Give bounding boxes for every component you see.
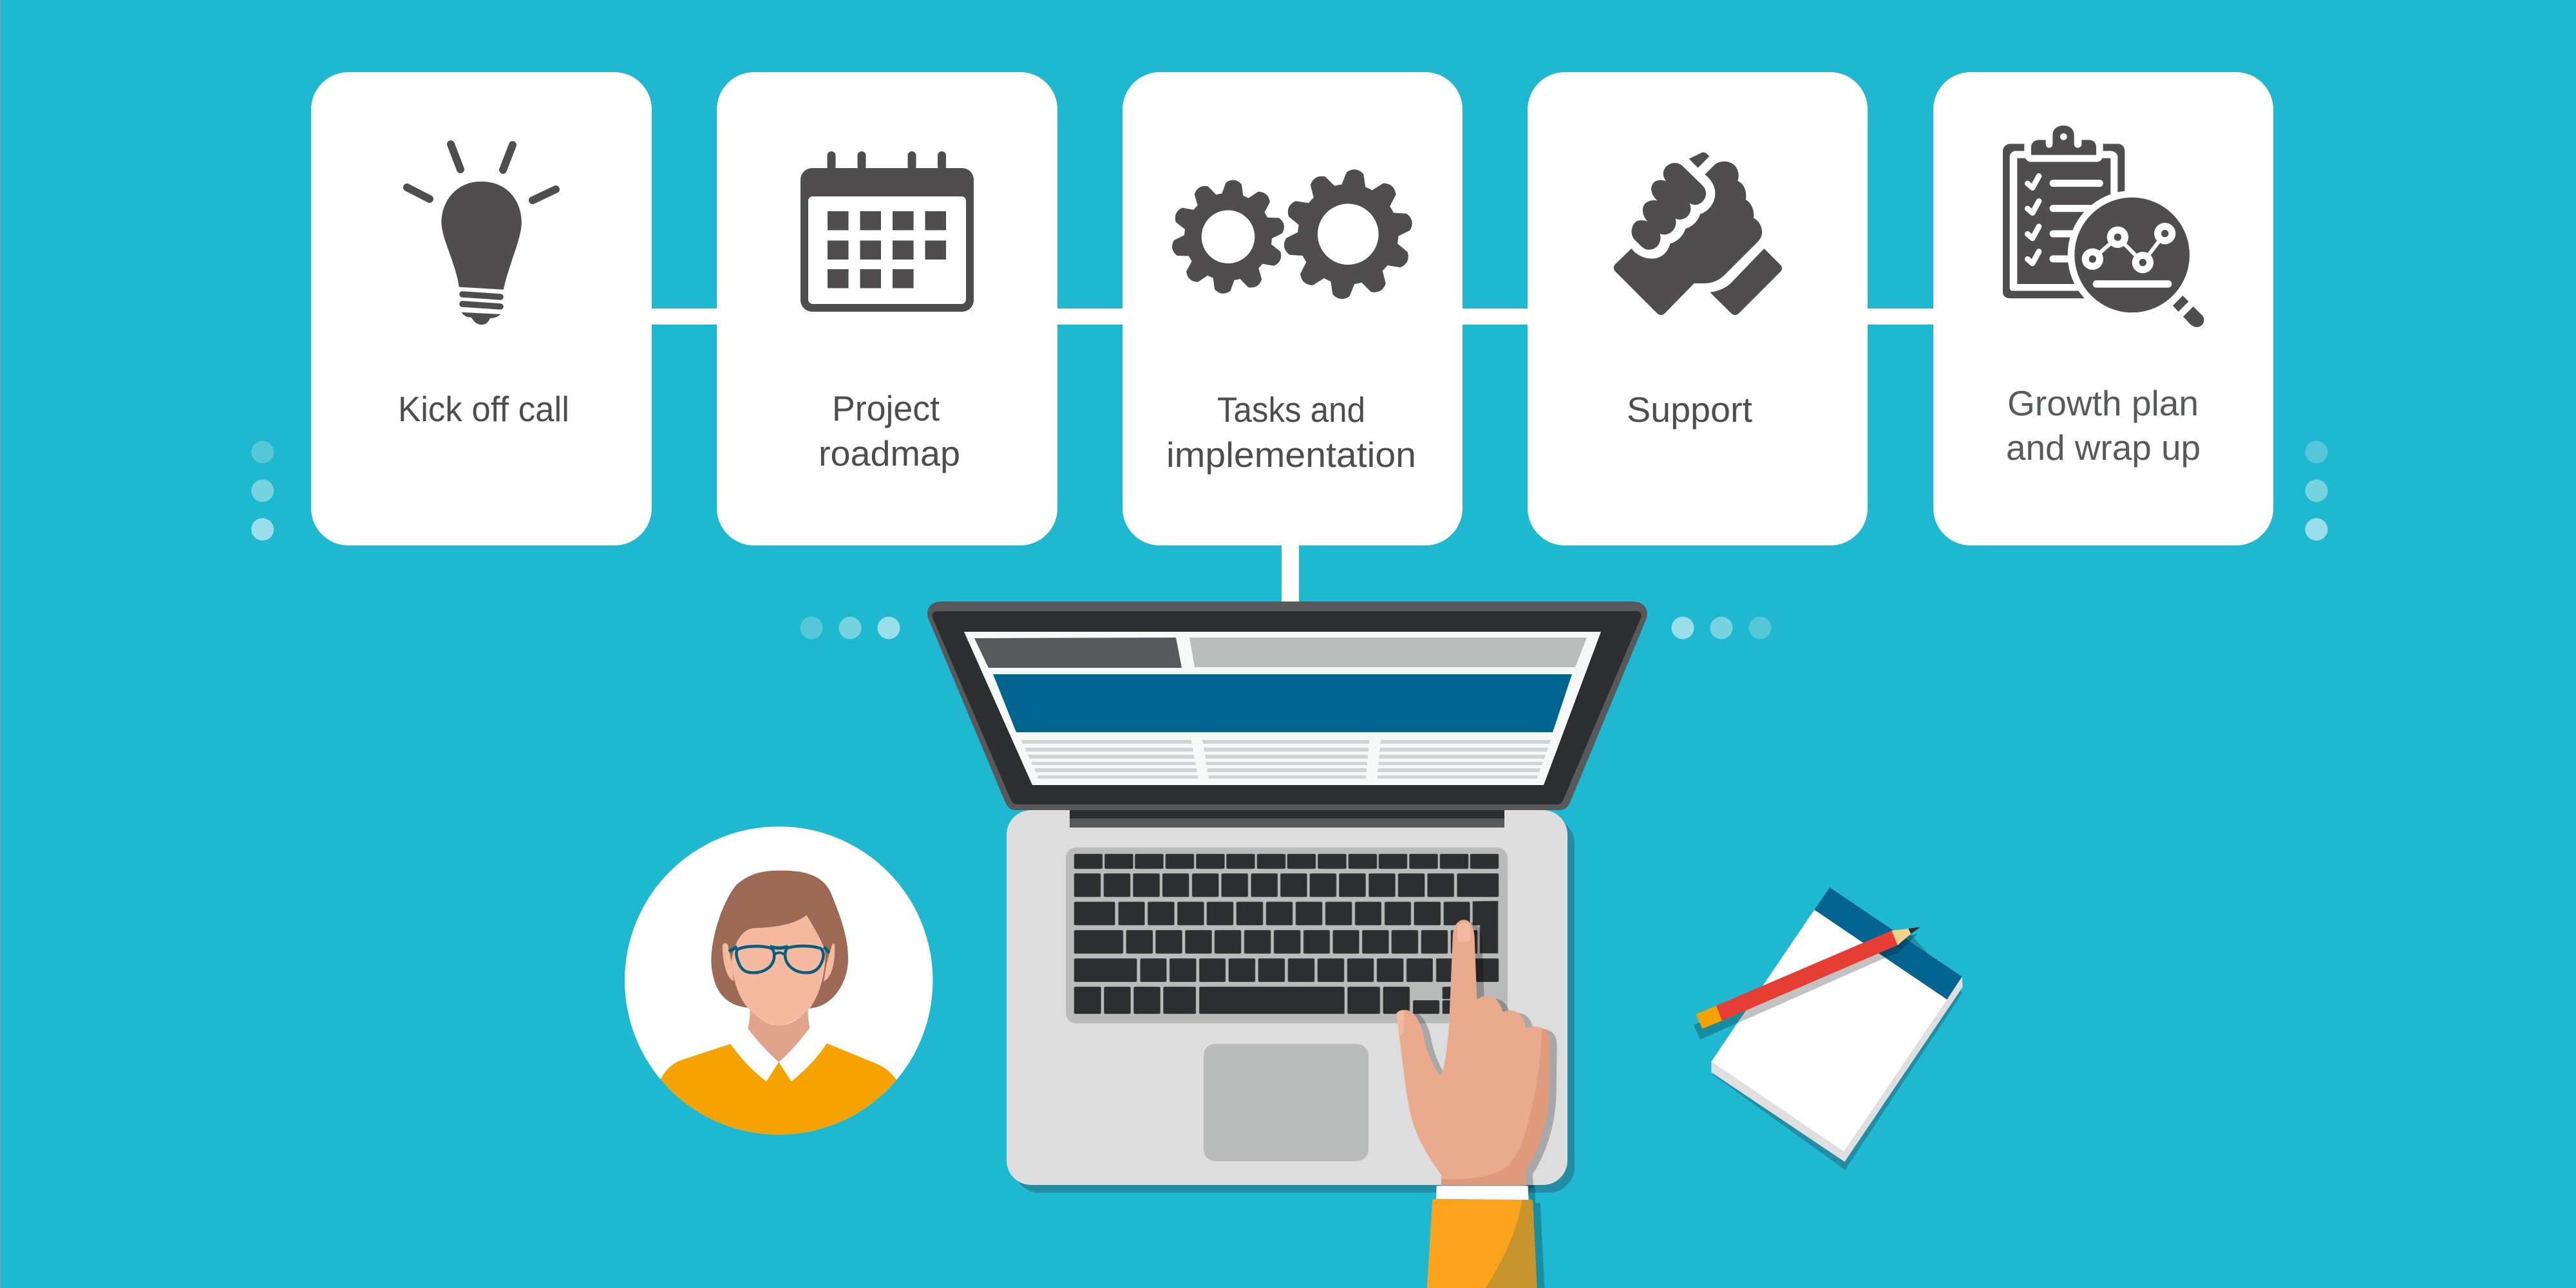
label: Project: [832, 388, 940, 428]
decorative dots: right of cards: [2306, 440, 2327, 541]
row 4: [1074, 930, 1123, 954]
icon: light bulb: [407, 144, 556, 325]
icon: clasped hands: [1614, 153, 1782, 315]
notepad edges: [1711, 977, 1963, 1162]
icon: calendar: [800, 151, 974, 312]
keyboard: [1066, 848, 1508, 1023]
card: Kick off call: [311, 72, 652, 545]
icon: gears: [1167, 164, 1419, 305]
laptop: [927, 601, 1647, 1193]
laptop base: [1007, 810, 1567, 1185]
decorative dots: right of laptop: [1672, 617, 1771, 639]
label: roadmap: [819, 433, 960, 473]
pencil: [1696, 927, 1920, 1028]
laptop hinge: [1070, 810, 1504, 828]
label: [1166, 390, 1416, 475]
row 6: [1074, 987, 1101, 1014]
sleeve shadow: [1526, 1186, 1545, 1288]
laptop base shadow: [1014, 818, 1575, 1193]
row 3: [1074, 902, 1115, 925]
avatar: woman with glasses: [625, 826, 933, 1144]
card: Tasks and implementation: [1122, 72, 1463, 545]
laptop lid: [927, 601, 1647, 810]
label: Kick off call: [398, 389, 569, 429]
label: Tasks and: [1217, 390, 1365, 430]
ears: [723, 943, 835, 981]
sleeve: [1426, 1199, 1537, 1288]
label: [2006, 383, 2201, 468]
connector: vertical line to laptop: [1282, 541, 1299, 603]
label: Support: [1627, 390, 1752, 430]
face: [732, 915, 826, 1025]
decorative dots: left of laptop: [800, 617, 900, 639]
shirt cuff: [1436, 1186, 1528, 1200]
hand: [1396, 920, 1549, 1186]
row 2: [1074, 873, 1101, 897]
notepad sheet: [1711, 910, 1947, 1151]
label: [819, 388, 960, 473]
sweater: [661, 1043, 896, 1135]
hand pointing at keyboard: [1396, 920, 1557, 1288]
screen: [964, 632, 1601, 785]
glasses: [729, 946, 829, 972]
hair: [711, 871, 848, 1009]
label: and wrap up: [2006, 428, 2201, 468]
card: Growth plan and wrap up: [1933, 72, 2273, 545]
card: Support: [1528, 72, 1868, 545]
hand shadow: [1404, 922, 1557, 1188]
neck: [748, 1009, 810, 1062]
decorative dots: left of cards: [251, 440, 274, 541]
trackpad: [1204, 1044, 1368, 1161]
label: Growth plan: [2007, 383, 2199, 423]
icon: clipboard and magnifier: [2003, 126, 2204, 327]
notepad and pencil: [1694, 887, 1963, 1170]
notepad binding: [1814, 887, 1962, 999]
row 5: [1074, 958, 1137, 982]
row 1: [1074, 854, 1103, 869]
pencil shadow: [1694, 934, 1918, 1039]
label: implementation: [1166, 435, 1416, 475]
connector: horizontal line between cards: [644, 308, 1945, 325]
card: Project roadmap: [717, 72, 1057, 545]
enter key: [1473, 901, 1498, 953]
notepad shadow: [1712, 934, 1962, 1170]
